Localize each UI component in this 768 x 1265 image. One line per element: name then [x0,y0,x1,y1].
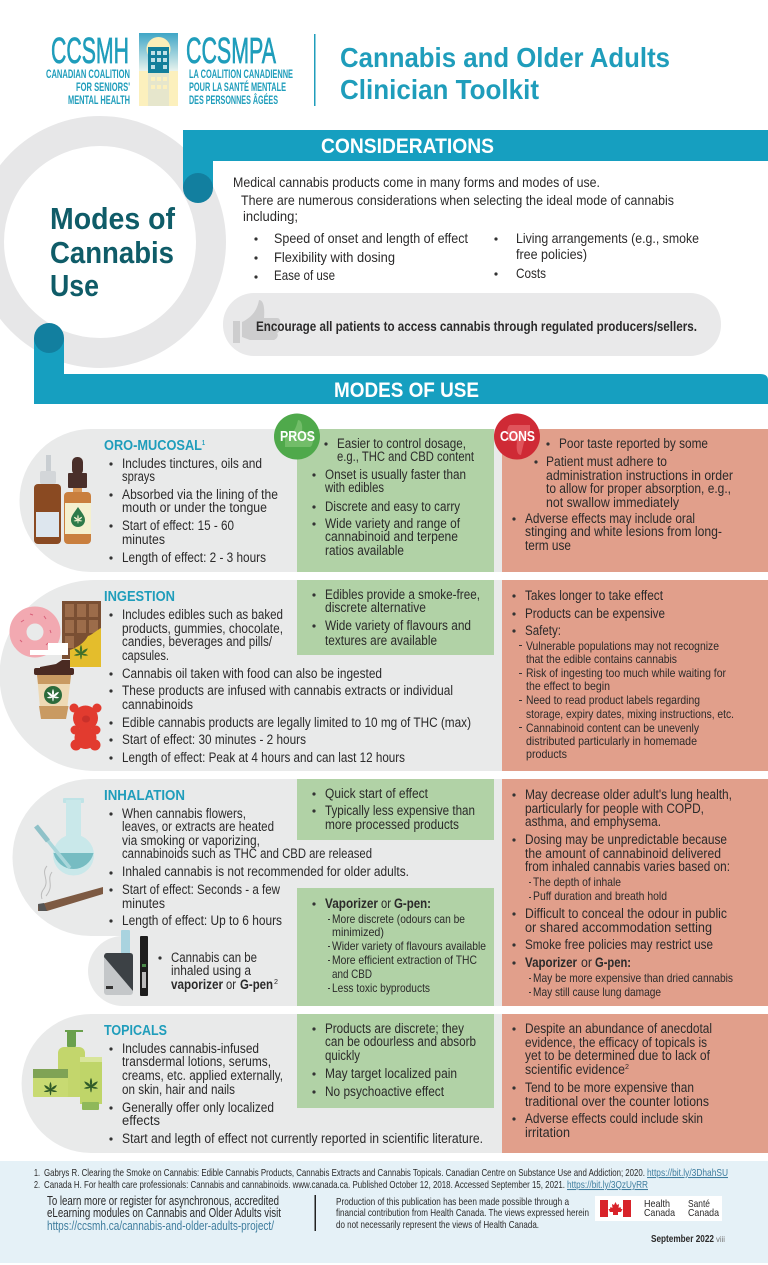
cons: topicals [512,1021,712,1140]
pros: topicals: May target localized pain [325,1066,457,1081]
cons: inhalation: the amount of cannabinoid delivered [525,846,721,861]
text: inhalation details: Start of effect: Seconds - a few [122,882,280,897]
cons: ingestion: Safety: [525,623,561,638]
learn more text: eLearning modules on Cannabis and Older Adults visit [47,1206,281,1220]
logo: Health Canada: Canada [644,1207,675,1219]
panel: ingestion [0,580,768,771]
cons: ingestion [512,588,734,761]
cons: topicals: scientific evidence [525,1062,625,1077]
badge: cons: CONS [500,429,535,445]
logo: CCSMH / CCSMPA: CANADIAN COALITION [46,67,130,81]
pros: ingestion: discrete alternative [325,600,426,615]
pros: vaporizer or g-pen: Vaporizer [325,896,379,911]
text: topicals details: on skin, hair and nails [122,1082,235,1097]
cons: ingestion: storage, expiry dates, mixing instructions, etc. [526,707,734,721]
considerations text: There are numerous considerations when selecting the ideal mode of cannabis [241,192,674,208]
callout: regulated producers [223,293,721,356]
cons: topicals: yet to be determined due to lack of [525,1048,710,1063]
text: ingestion details: products, gummies, chocolate, [122,621,283,636]
heading: Modes of Cannabis Use: Use [50,268,99,303]
pros: ingestion: Wide variety of flavours and [325,618,471,633]
considerations text: Speed of onset and length of effect [274,230,468,246]
cons: ingestion: Takes longer to take effect [525,588,663,603]
text: oro-mucosal details [109,456,278,565]
logo: CCSMH / CCSMPA: FOR SENIORS' [76,80,130,94]
cons: inhalation: from inhaled cannabis varies based on: [525,859,730,874]
references: https://bit.ly/3DhahSU [647,1167,728,1179]
funding statement: do not necessarily represent the views of Health Canada. [336,1219,539,1231]
cons: oro-mucosal: not swallow immediately [546,495,679,510]
cons: oro-mucosal: term use [525,538,571,553]
logo: Health Canada: Santé [688,1198,710,1210]
considerations text: Flexibility with dosing [274,249,395,265]
cons: inhalation: The depth of inhale [533,875,621,889]
cons: ingestion: distributed particularly in homemade [526,734,697,748]
text: topicals details: transdermal lotions, serums, [122,1054,271,1069]
panel: inhalation [13,779,768,1006]
text: ingestion details: These products are infused with cannabis extracts or individual [122,683,453,698]
text: ingestion details: capsules. [122,648,169,663]
text: inhalation details: via smoking or vaporizing, [122,833,260,848]
cons: inhalation: Dosing may be unpredictable because [525,832,727,847]
pros: oro-mucosal [312,436,474,558]
considerations text [233,174,699,283]
text: inhalation details: Length of effect: Up to 6 hours [122,913,282,928]
text: ingestion details [109,607,471,765]
funding statement: financial contribution from Health Canada. The views expressed herein [336,1207,589,1219]
modes of use banner [34,323,768,404]
pros: vaporizer or g-pen: and CBD [332,967,372,981]
heading: Modes of Cannabis Use: Modes of [50,201,176,236]
pros: vaporizer or g-pen: minimized) [332,925,384,939]
pros: vaporizer or g-pen [312,896,486,995]
footer [0,1161,768,1263]
text: ingestion details: cannabinoids [122,697,193,712]
cons: inhalation: Puff duration and breath hold [533,889,667,903]
text: vaporizer note: inhaled using a [171,963,251,978]
pros: inhalation: Typically less expensive than [325,803,475,818]
heading: ingestion: INGESTION [104,589,175,605]
heading: inhalation: INHALATION [104,788,185,804]
text: inhalation details: leaves, or extracts are heated [122,819,274,834]
text: ingestion details: candies, beverages and pills/ [122,634,272,649]
text: ingestion details: Length of effect: Peak at 4 hours and can last 12 hours [122,750,405,765]
pros: vaporizer or g-pen: or [381,896,391,911]
cons: ingestion: Risk of ingesting too much while waiting for [526,666,726,680]
icon: thumbs up [233,300,280,343]
text: vaporizer note [158,950,278,992]
pros: inhalation: more processed products [325,817,459,832]
pros: ingestion: Edibles provide a smoke-free, [325,587,480,602]
references: Canada H. For health care professionals: Cannabis and cannabinoids. www.canada.ca. Published October 12, 2018. Accessed September 15, 2021. [44,1179,565,1191]
logo: Health Canada: Health [644,1198,670,1210]
ring: modes of cannabis use [0,131,211,353]
text: topicals details: Start and legth of effect not currently reported in scientific literature. [122,1131,483,1146]
title: Cannabis and Older Adults [340,42,670,73]
text: oro-mucosal details: mouth or under the tongue [122,500,267,515]
modes of use banner: MODES OF USE [334,379,479,402]
cons: oro-mucosal: Patient must adhere to [546,454,667,469]
heading: Modes of Cannabis Use: Cannabis [50,235,174,270]
cons: ingestion: Products can be expensive [525,606,665,621]
considerations text: free policies) [516,246,587,262]
cons: oro-mucosal: administration instructions in order [546,468,733,483]
text: inhalation details: cannabinoids such as THC and CBD are released [122,846,372,861]
cons: oro-mucosal: Poor taste reported by some [559,436,708,451]
pros: topicals [312,1021,476,1099]
logo: CCSMH / CCSMPA: MENTAL HEALTH [68,93,130,107]
title: Clinician Toolkit [340,74,539,105]
pros: topicals: Products are discrete; they [325,1021,464,1036]
logo: CCSMH / CCSMPA: CCSMPA [186,30,276,71]
text: topicals details: Includes cannabis-infused [122,1041,259,1056]
icon: edibles [18,601,102,750]
text: vaporizer note: G-pen [240,977,273,992]
heading: oro-mucosal: ORO-MUCOSAL [104,438,202,454]
text: oro-mucosal details: sprays [122,469,155,484]
icon: bong and joint [36,798,103,911]
text: oro-mucosal details: Includes tinctures, oils and [122,456,262,471]
cons: inhalation: asthma, and emphysema. [525,814,661,829]
pros: oro-mucosal: Easier to control dosage, [337,436,466,451]
references: https://bit.ly/3QzUyRR [567,1179,648,1191]
pros: oro-mucosal: cannabinoid and terpene [325,529,458,544]
cons: inhalation: Difficult to conceal the odour in public [525,906,727,921]
pros: oro-mucosal: Onset is usually faster than [325,467,466,482]
icon: lotions [33,1030,102,1110]
text: ingestion details: Includes edibles such as baked [122,607,283,622]
text: inhalation details [109,806,409,928]
pros: oro-mucosal: with edibles [324,480,384,495]
references: 1. [34,1167,40,1179]
considerations text: including; [243,208,298,224]
date: viii [716,1235,725,1244]
cons: inhalation: May decrease older adult's lung health, [525,787,732,802]
cons: ingestion: that the edible contains cannabis [526,652,677,666]
pros: topicals: can be odourless and absorb [325,1034,476,1049]
cons: inhalation: G-pen: [595,955,631,970]
logo: CCSMH / CCSMPA: POUR LA SANTÉ MENTALE [189,79,286,94]
pros: vaporizer or g-pen: G-pen: [394,896,431,911]
cons: ingestion: Cannabinoid content can be unevenly [526,721,699,735]
heading: oro-mucosal: 1 [202,440,205,447]
logo: Health Canada: Canada [688,1207,719,1219]
logo: CCSMH / CCSMPA: CCSMH [51,30,129,71]
cons: ingestion: Vulnerable populations may not recognize [526,639,719,653]
badge: pros: PROS [280,429,315,445]
text: topicals details [109,1041,483,1146]
learn more text: https://ccsmh.ca/cannabis-and-older-adults-project/ [47,1219,274,1233]
pros: vaporizer or g-pen: Less toxic byproducts [332,981,430,995]
pros: vaporizer or g-pen: More efficient extraction of THC [332,953,477,967]
icon: tincture bottles [34,455,91,544]
cons: inhalation: May be more expensive than dried cannabis [533,971,733,985]
considerations text: Costs [516,265,546,281]
cons: inhalation: or [581,955,592,970]
badge: cons [494,414,540,460]
text: topicals details: Generally offer only localized [122,1100,274,1115]
funding statement [336,1196,589,1231]
text: ingestion details: Edible cannabis products are legally limited to 10 mg of THC (max) [122,715,471,730]
text: vaporizer note: 2 [274,979,278,986]
heading: topicals: TOPICALS [104,1023,167,1039]
pros: topicals: quickly [325,1048,360,1063]
cons: topicals: traditional over the counter lotions [525,1094,709,1109]
text: oro-mucosal details: minutes [122,532,165,547]
cons: inhalation: particularly for people with COPD, [525,801,704,816]
text: vaporizer note: Cannabis can be [171,950,257,965]
considerations banner: CONSIDERATIONS [321,135,494,158]
cons: topicals: Despite an abundance of anecdotal [525,1021,712,1036]
text: topicals details: creams, etc. applied externally, [122,1068,283,1083]
cons: inhalation: May still cause lung damage [533,985,661,999]
pros: vaporizer or g-pen: More discrete (odours can be [332,912,465,926]
panel: topicals [22,1014,768,1153]
badge: pros [274,414,320,460]
references [34,1167,728,1191]
text: inhalation details: Inhaled cannabis is not recommended for older adults. [122,864,409,879]
cons: topicals: evidence, the efficacy of topicals is [525,1035,707,1050]
cons: ingestion: the effect to begin [526,679,610,693]
cons: oro-mucosal: stinging and white lesions from long- [525,524,722,539]
logo: CCSMH / CCSMPA: LA COALITION CANADIENNE [189,67,293,81]
cons: topicals: 2 [625,1064,629,1071]
cons: inhalation [512,787,733,999]
text: topicals details: effects [122,1113,160,1128]
considerations banner [183,130,768,203]
text: inhalation details: When cannabis flowers, [122,806,246,821]
considerations text: Ease of use [274,267,335,283]
cons: inhalation: Smoke free policies may restrict use [525,937,713,952]
cons: topicals: irritation [525,1125,570,1140]
cons: inhalation: or shared accommodation setting [525,920,712,935]
title [340,42,670,105]
logo: CCSMH / CCSMPA: DES PERSONNES ÂGÉES [189,92,278,107]
cons: oro-mucosal: to allow for proper absorption, e.g., [546,481,731,496]
learn more text: To learn more or register for asynchronous, accredited [47,1194,279,1208]
icon: vaporizer and g-pen [104,930,148,996]
text: oro-mucosal details: Length of effect: 2 - 3 hours [122,550,266,565]
panel: oro-mucosal [19,414,768,572]
text: oro-mucosal details: Absorbed via the lining of the [122,487,278,502]
date: September 2022 [651,1233,714,1245]
cons: topicals: Adverse effects could include skin [525,1111,703,1126]
pros: oro-mucosal: e.g., THC and CBD content [337,449,474,464]
considerations text: Living arrangements (e.g., smoke [516,230,699,246]
funding statement: Production of this publication has been made possible through a [336,1196,569,1208]
text: vaporizer note: vaporizer [171,977,224,992]
cons: ingestion: products [526,747,567,761]
cons: topicals: Tend to be more expensive than [525,1080,694,1095]
cons: ingestion: Need to read product labels regarding [526,693,700,707]
pros: oro-mucosal: Discrete and easy to carry [325,499,460,514]
pros: oro-mucosal: Wide variety and range of [325,516,460,531]
references: 2. [34,1179,40,1191]
pros: inhalation: Quick start of effect [325,786,428,801]
cons: inhalation: Vaporizer [525,955,578,970]
pros: ingestion: textures are available [325,633,437,648]
logo: Health Canada [595,1196,722,1221]
pros: vaporizer or g-pen: Wider variety of flavours available [332,939,486,953]
text: ingestion details: Cannabis oil taken with food can also be ingested [122,666,382,681]
text: ingestion details: Start of effect: 30 minutes - 2 hours [122,732,306,747]
cons: oro-mucosal [512,436,733,553]
text: oro-mucosal details: Start of effect: 15 - 60 [122,518,234,533]
callout: regulated producers: Encourage all patients to access cannabis through regulated producers/sellers. [256,319,697,334]
logo: CCSMH / CCSMPA [46,30,293,107]
text: vaporizer note: or [226,977,236,992]
pros: topicals: No psychoactive effect [325,1084,444,1099]
learn more text [47,1194,281,1233]
considerations text: Medical cannabis products come in many forms and modes of use. [233,174,600,190]
pros: oro-mucosal: ratios available [325,543,404,558]
text: inhalation details: minutes [122,896,165,911]
pros: ingestion [312,587,480,648]
heading: Modes of Cannabis Use [50,201,176,303]
pros: inhalation [312,786,475,832]
cons: oro-mucosal: Adverse effects may include oral [525,511,695,526]
